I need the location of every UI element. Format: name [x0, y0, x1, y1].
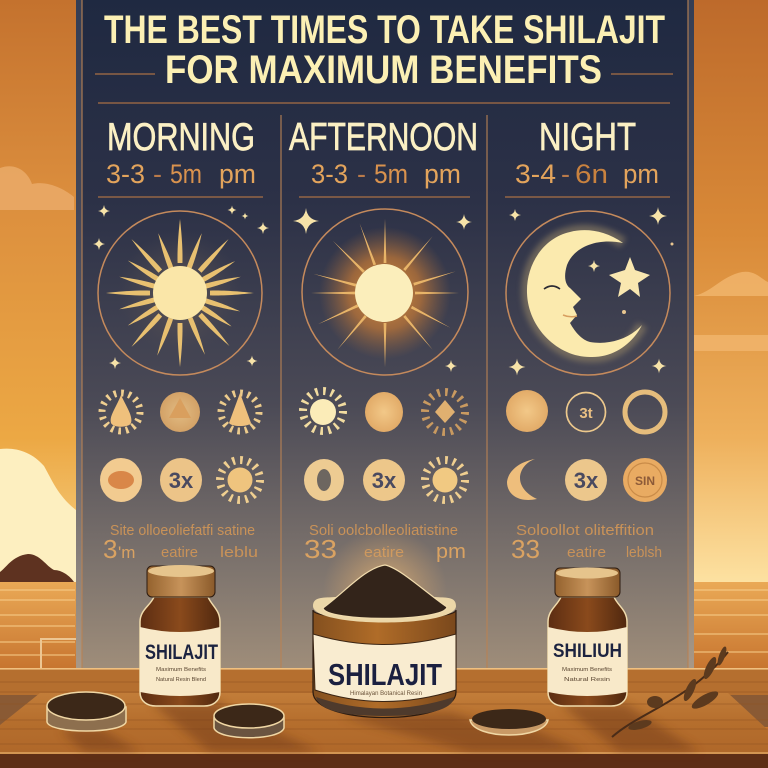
time ranges: [106, 159, 659, 189]
small caption text: Soli oolcbolleoliatistine: [309, 522, 458, 539]
icons: night row 2: SIN: [635, 474, 655, 488]
decorative sparkles: [93, 205, 667, 376]
bottle: left: Natural Resin Blend: [156, 677, 206, 683]
time ranges: 5m: [374, 159, 408, 189]
time ranges: pm: [424, 159, 461, 189]
island: [0, 554, 74, 582]
bottle: right: SHILIUH: [553, 641, 622, 662]
shadows on table: [60, 702, 700, 752]
small caption text: leblsh: [626, 544, 662, 561]
small shilajit disc left: [47, 692, 126, 731]
bottle: left: SHILAJIT: [145, 641, 218, 664]
small caption text: eatire: [567, 544, 606, 561]
time ranges: 3-3: [106, 159, 145, 189]
small caption text: pm: [436, 541, 466, 563]
small caption text: eatire: [364, 544, 404, 561]
icons: afternoon row 1: [303, 391, 465, 432]
jar: centre with powder: Himalayan Botanical Resin: [350, 691, 422, 697]
icon: morning sun: [98, 211, 262, 375]
setting sun pale cloud: [0, 449, 76, 584]
small caption text: eatire: [161, 544, 198, 561]
herb sprig: [612, 646, 728, 737]
column headings: [107, 116, 636, 159]
cloud left: [0, 166, 74, 210]
jar: centre with powder: [313, 528, 456, 718]
small shilajit dish right: [470, 709, 548, 735]
icons: night row 2: 3x: [574, 468, 599, 493]
icon: afternoon sun: [302, 209, 468, 375]
jar: centre with powder: SHILAJIT: [328, 657, 442, 692]
small caption text: 33: [511, 534, 540, 564]
column headings: MORNING: [107, 116, 255, 159]
icons: night row 1: 3t: [579, 405, 593, 422]
bottle: right: [548, 568, 627, 706]
icon: night crescent moon: [506, 211, 674, 375]
icons: afternoon row 2: 3x: [372, 468, 397, 493]
railing: [41, 638, 76, 696]
panel: main board: [76, 0, 694, 672]
time ranges: -: [153, 159, 162, 189]
small caption text: [103, 522, 662, 564]
small shilajit disc centre-left: [214, 704, 284, 738]
icons: afternoon row 2: [304, 459, 465, 501]
column headings: AFTERNOON: [289, 116, 478, 159]
icons: morning row 2: [100, 458, 260, 502]
time ranges: pm: [623, 159, 659, 189]
time ranges: pm: [219, 159, 256, 189]
bottle: left: [140, 565, 220, 706]
clouds right: [694, 272, 768, 351]
column headings: NIGHT: [539, 116, 636, 159]
bottle: left: Maximum Benefits: [156, 667, 207, 673]
time ranges: 5m: [170, 159, 202, 189]
time ranges: 3-3: [311, 159, 348, 189]
small caption text: leblu: [220, 544, 258, 561]
title: [104, 8, 665, 92]
title: FOR MAXIMUM BENEFITS: [165, 48, 602, 92]
sea: [0, 582, 768, 672]
icons: night row 2: [507, 458, 667, 502]
background: sunset sky left: [0, 0, 80, 584]
icons: morning row 2: 3x: [169, 468, 194, 493]
time ranges: -: [357, 159, 366, 189]
bottle: right: Natural Resin: [564, 677, 610, 683]
icons: morning row 1: [102, 392, 259, 432]
small caption text: 3: [103, 534, 117, 564]
small caption text: Site olloeoliefatfi satine: [110, 522, 255, 539]
background: sunset sky right: [690, 0, 768, 584]
time ranges: 6n: [575, 159, 608, 189]
small caption text: 'm: [118, 543, 135, 562]
time ranges: -: [561, 159, 570, 189]
icons: night row 1: [506, 390, 665, 432]
small caption text: Soloollot oliteffition: [516, 522, 654, 539]
time ranges: 3-4: [515, 159, 556, 189]
table: [0, 668, 768, 768]
small caption text: 33: [304, 534, 337, 564]
bottle: right: Maximum Benefits: [562, 667, 613, 673]
